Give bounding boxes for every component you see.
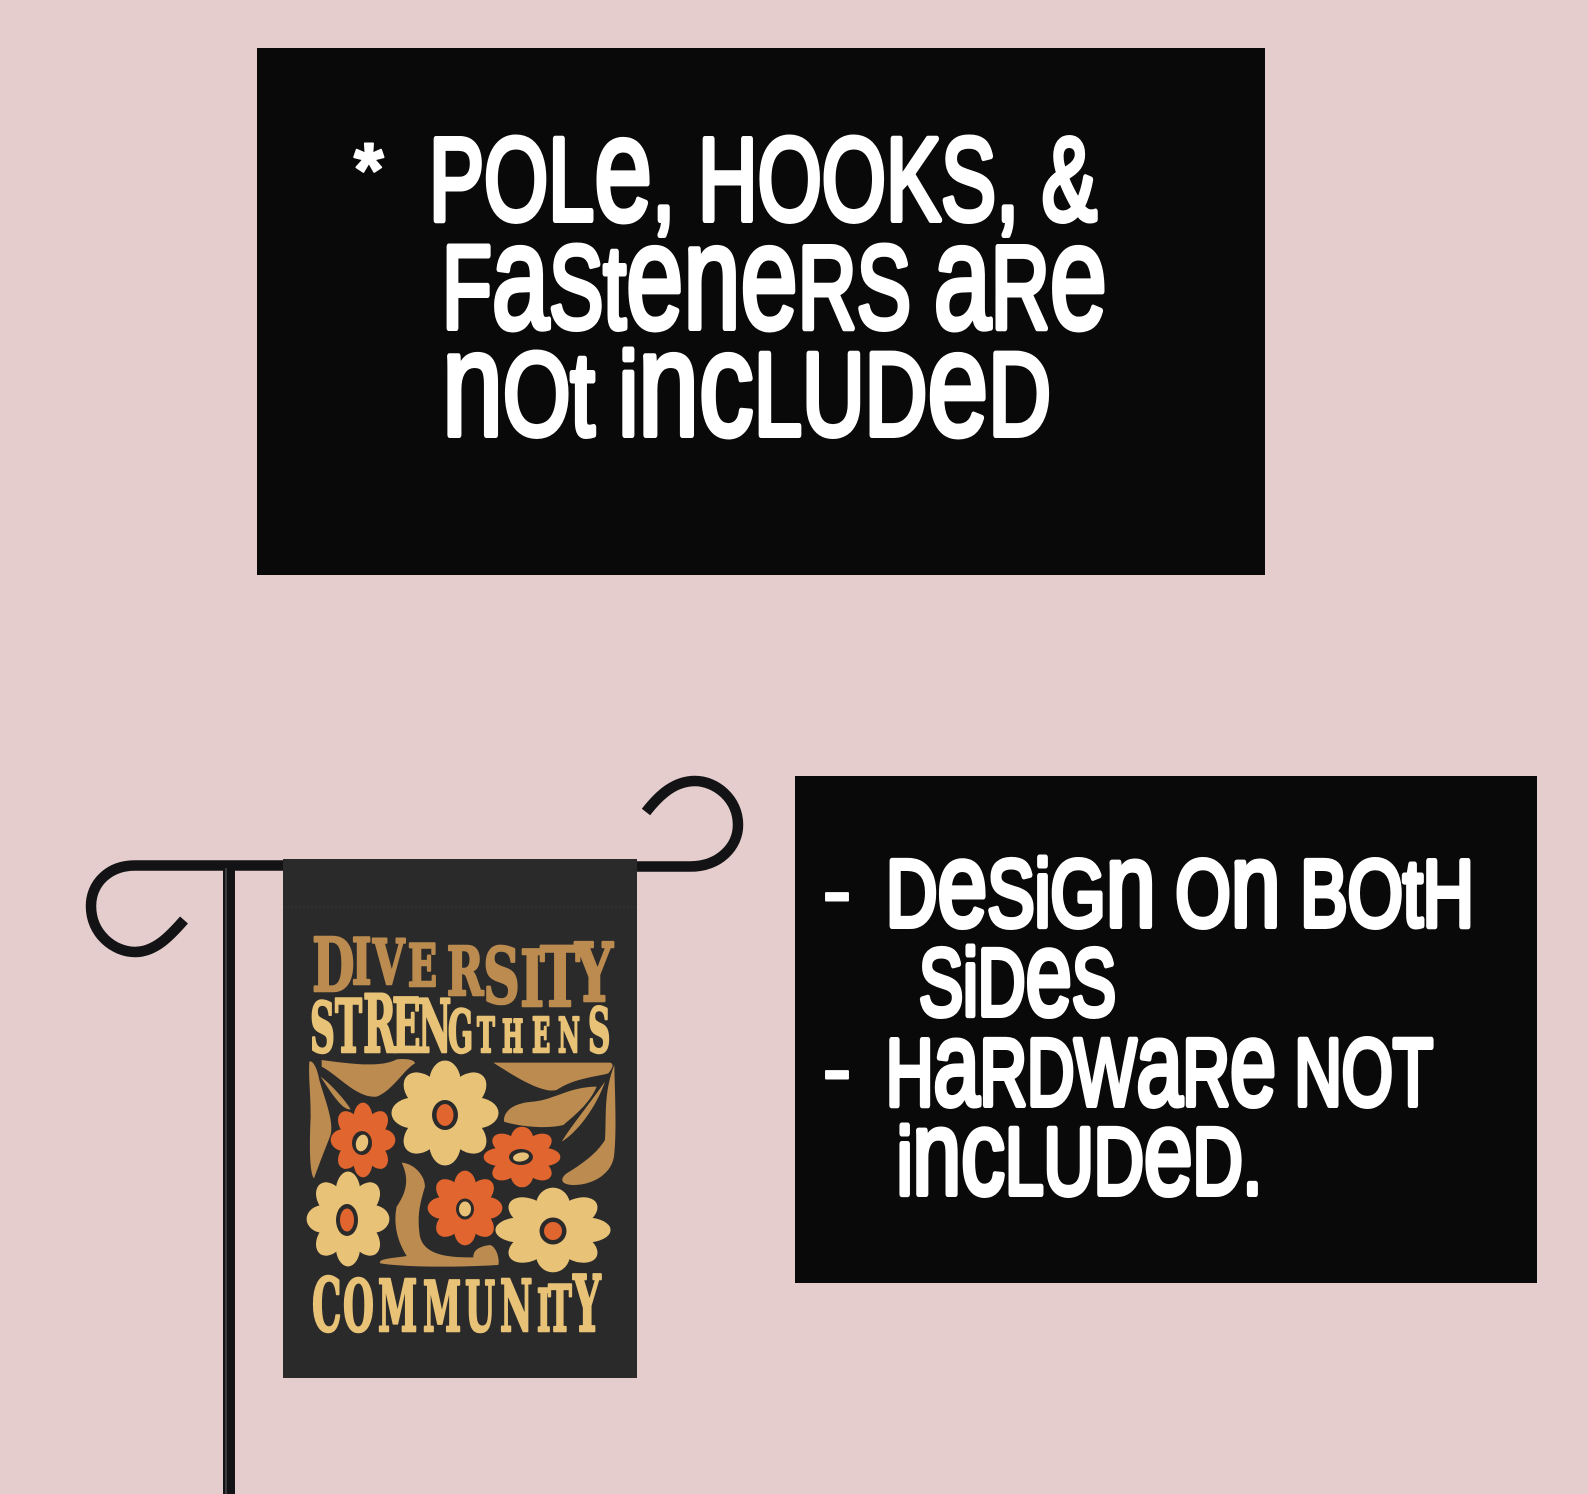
flag art: flowers — [307, 1060, 611, 1272]
flag headline: STRENGTHENS: E — [532, 1006, 550, 1063]
flag headline: COMMUNITY: N — [500, 1265, 532, 1349]
flag — [283, 859, 637, 1378]
flag headline: DIVERSITY: I — [520, 933, 544, 1025]
garden flag stand with hooks — [91, 781, 738, 1494]
cream flower lower right — [495, 1188, 611, 1272]
orange flower upper left — [331, 1103, 395, 1177]
flag headline: COMMUNITY: C — [312, 1261, 341, 1349]
flag headline: COMMUNITY: M — [378, 1265, 417, 1349]
flag headline: DIVERSITY: D — [312, 921, 355, 1009]
flag headline: STRENGTHENS: N — [418, 984, 451, 1070]
panel: design and hardware notes — [795, 776, 1537, 1283]
notes text — [822, 818, 1474, 1220]
flag headline: COMMUNITY: M — [423, 1266, 461, 1347]
cream flower lower left — [307, 1172, 389, 1266]
notes text: - — [822, 1015, 852, 1121]
flag headline: STRENGTHENS: H — [502, 1012, 523, 1063]
flag headline: COMMUNITY: T — [548, 1270, 572, 1346]
flag headline: DIVERSITY: Y — [574, 927, 614, 1021]
orange flower upper right — [484, 1127, 560, 1187]
flag headline: COMMUNITY: Y — [572, 1258, 601, 1350]
orange flower lower centre — [428, 1171, 502, 1245]
flag headline: STRENGTHENS: S — [310, 987, 335, 1068]
flag art: leaves — [309, 1059, 616, 1267]
flag headline: STRENGTHENS: R — [363, 977, 397, 1071]
flag headline: DIVERSITY: I — [352, 924, 372, 999]
notes text: - — [822, 837, 852, 943]
notes text: incLUDeD. — [897, 1086, 1262, 1220]
flag headline: STRENGTHENS: T — [477, 1006, 495, 1063]
asterisk: * — [354, 128, 384, 213]
flag headline: DIVERSITY: V — [372, 927, 406, 999]
flag headline: STRENGTHENS: N — [558, 1006, 580, 1063]
notes text: SiDeS — [919, 907, 1116, 1041]
large cream flower — [391, 1060, 499, 1166]
notice text — [429, 85, 1107, 467]
notice text: POLe, HOOKS, & — [429, 85, 1097, 252]
notice text: nOt incLUDeD — [442, 300, 1051, 467]
flag headline: STRENGTHENS: S — [588, 994, 610, 1067]
flag headline: DIVERSITY: S — [483, 932, 520, 1022]
flag headline: STRENGTHENS: E — [392, 981, 421, 1070]
flag headline: DIVERSITY: T — [540, 930, 580, 1026]
flag headline: STRENGTHENS: T — [335, 984, 362, 1070]
flag headline: DIVERSITY: R — [447, 934, 484, 1012]
flag headline: STRENGTHENS: G — [448, 996, 473, 1066]
flag headline: DIVERSITY: E — [408, 932, 437, 1000]
notice text: FaSteneRS aRe — [442, 193, 1107, 360]
flag headline: COMMUNITY: U — [465, 1266, 495, 1347]
notes text: DeSiGn On BOtH — [886, 818, 1474, 952]
flag headline: COMMUNITY: I — [537, 1277, 551, 1345]
panel: pole, hooks and fasteners notice — [257, 48, 1265, 575]
notes text: HaRDWaRe NOT — [886, 997, 1433, 1131]
flag headline: COMMUNITY: O — [343, 1265, 374, 1349]
